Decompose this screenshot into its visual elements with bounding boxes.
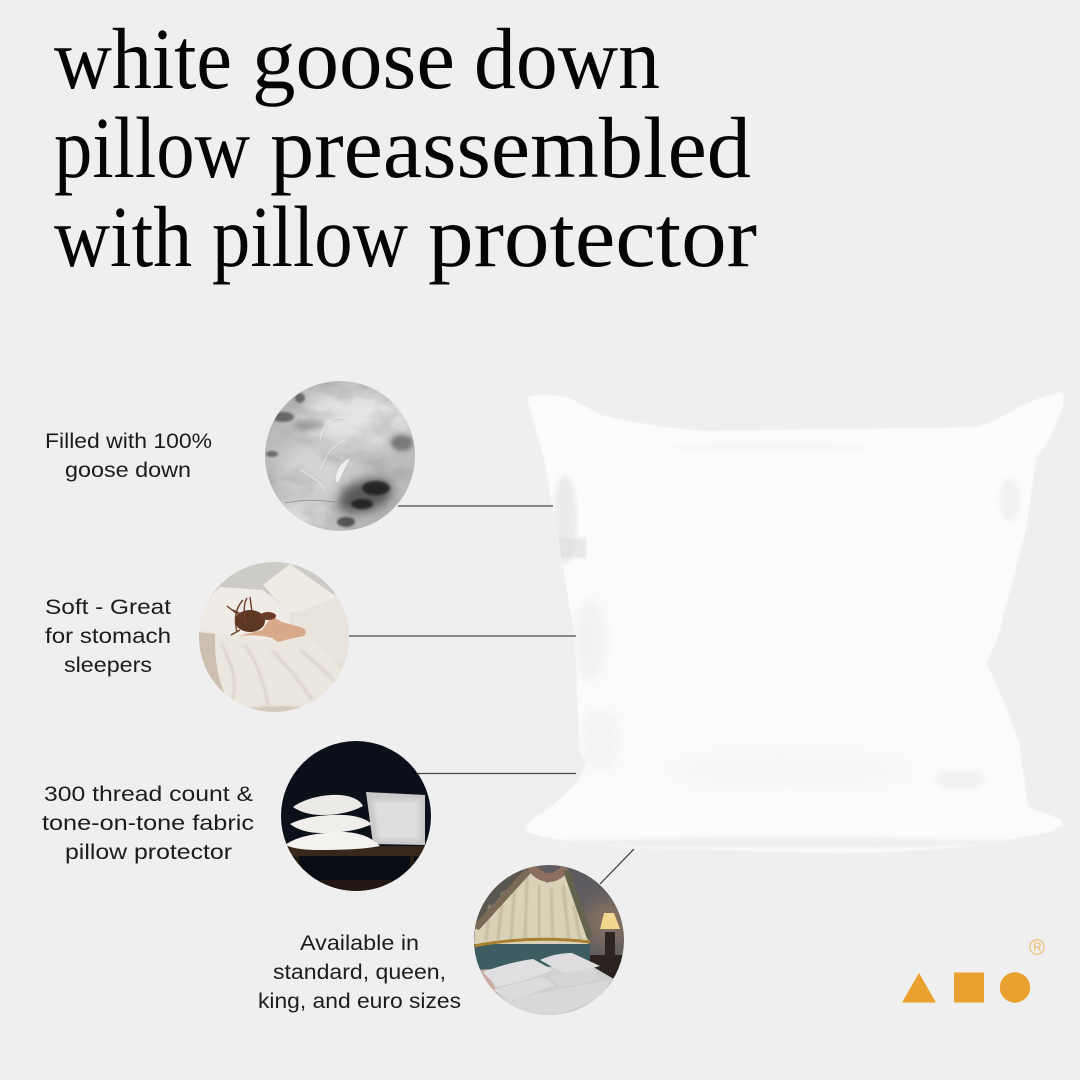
text: available sizes — [258, 932, 461, 1013]
text: thread count — [42, 783, 254, 864]
text: available sizes: king, and euro sizes — [258, 990, 461, 1013]
icon: triangle — [902, 973, 936, 1002]
title: goose — [252, 10, 455, 107]
text: soft for stomach sleepers: sleepers — [64, 654, 152, 677]
photo circle: woman sleeping — [199, 562, 349, 720]
connector line: goose down — [398, 505, 553, 507]
pillow image — [526, 392, 1064, 853]
text: filled with goose down: Filled with 100% — [45, 430, 212, 453]
text: thread count: 300 thread count & — [44, 783, 253, 806]
text: soft for stomach sleepers: for stomach — [45, 625, 171, 648]
text: filled with goose down: goose down — [65, 459, 191, 482]
text: soft for stomach sleepers: Soft - Great — [45, 596, 171, 619]
title: white — [54, 10, 232, 107]
text: available sizes: standard, queen, — [273, 961, 446, 984]
title: pillow — [54, 99, 250, 196]
title: protector — [428, 188, 757, 285]
text: filled with goose down — [45, 430, 212, 482]
title: with — [54, 188, 192, 285]
icon: registered mark — [1030, 940, 1044, 954]
text: thread count: pillow protector — [65, 841, 232, 864]
photo circle: goose down — [265, 381, 415, 531]
logo — [902, 940, 1044, 1003]
title: down — [474, 10, 660, 107]
text: soft for stomach sleepers — [45, 596, 171, 677]
connector line: thread count — [417, 772, 576, 774]
connector line: sizes — [600, 849, 634, 884]
icon: circle — [1000, 972, 1030, 1003]
icon: square — [954, 972, 984, 1002]
photo circle: pillow stack — [281, 741, 431, 891]
connector line: stomach sleepers — [349, 635, 576, 637]
title — [54, 10, 757, 285]
text: available sizes: Available in — [300, 932, 419, 955]
title: pillow — [212, 188, 408, 285]
photo circle: canopy bed — [474, 865, 632, 1015]
icon: registered mark: R — [1033, 942, 1042, 954]
title: preassembled — [270, 99, 751, 196]
text: thread count: tone-on-tone fabric — [42, 812, 254, 835]
